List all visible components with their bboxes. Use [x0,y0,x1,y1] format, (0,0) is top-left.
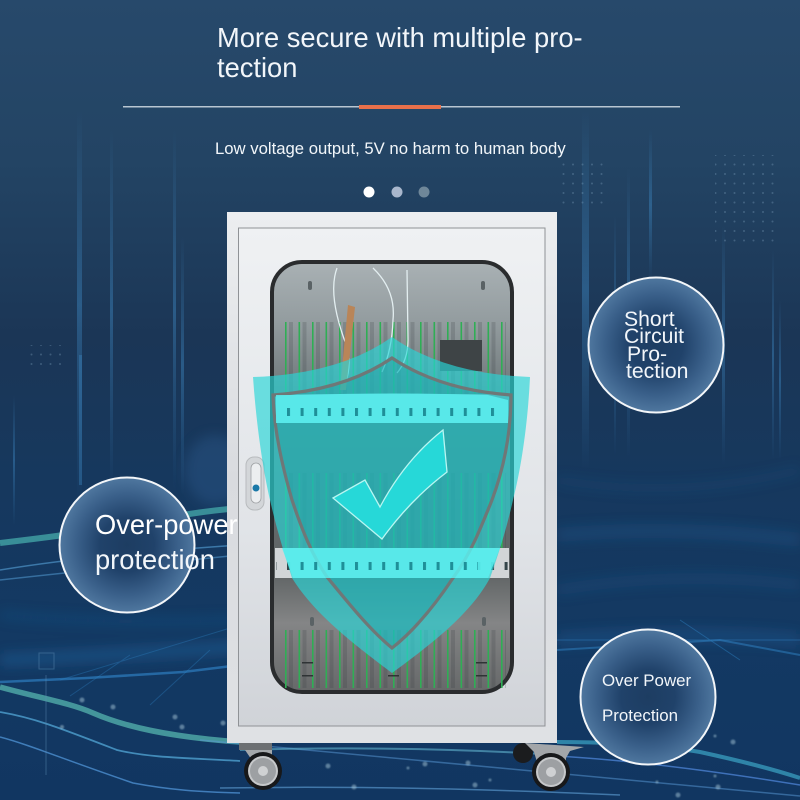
door panel [238,228,545,726]
upper shelf [275,394,509,423]
small tech bracket [39,653,54,775]
shield overlay with check mark [253,337,530,673]
callout: over power protection: Over Power [602,671,692,690]
charging slots upper [282,322,506,394]
callout: short circuit protection: Circuit [624,325,684,348]
callout: over power protection: Protection [602,706,678,725]
flowing teal and blue waves [0,508,800,796]
callout: over-power protection [60,478,238,612]
callout: over power protection [580,630,716,764]
upper shelf slots [287,408,495,416]
callout: short circuit protection: Pro- [627,343,667,366]
shield inner outline [273,358,511,648]
title [217,22,583,83]
right caster wheel with brake [513,743,584,791]
title: More secure with multiple pro- [217,22,583,53]
charging slots middle [282,473,506,548]
subtitle: Low voltage output, 5V no harm to human body [215,139,566,158]
sparkle particles [60,698,736,798]
bright shelf band lower [282,548,500,578]
glass window [272,262,512,692]
copper strip [340,305,355,390]
door lock [246,457,264,510]
title: tection [217,52,297,83]
callout: over-power protection: Over-power [95,509,238,540]
charging cabinet [227,212,584,791]
bright shelf band upper [276,394,508,423]
callout: short circuit protection: tection [626,360,688,383]
charging slots lower [282,630,506,688]
pagination dots [364,186,430,198]
title divider with orange accent [123,105,680,109]
left caster wheel [239,743,282,790]
dotted data texture [30,155,775,365]
dark module [440,340,482,371]
callout: over-power protection: protection [95,544,215,575]
callout: short circuit protection: Short [624,308,675,331]
soft glow beside the cabinet [185,435,245,505]
network glow lines [0,620,800,705]
internal cables [334,268,408,385]
cabinet body [227,212,557,743]
lower shelf [275,548,509,578]
shield body [253,337,530,673]
rack dashes [302,662,487,676]
check mark [333,430,447,539]
vertical light streaks [13,110,781,525]
wall mount holes [308,281,486,626]
callout: short circuit protection [588,278,724,412]
blurred data bands [0,470,800,660]
lower shelf slots [300,562,478,570]
